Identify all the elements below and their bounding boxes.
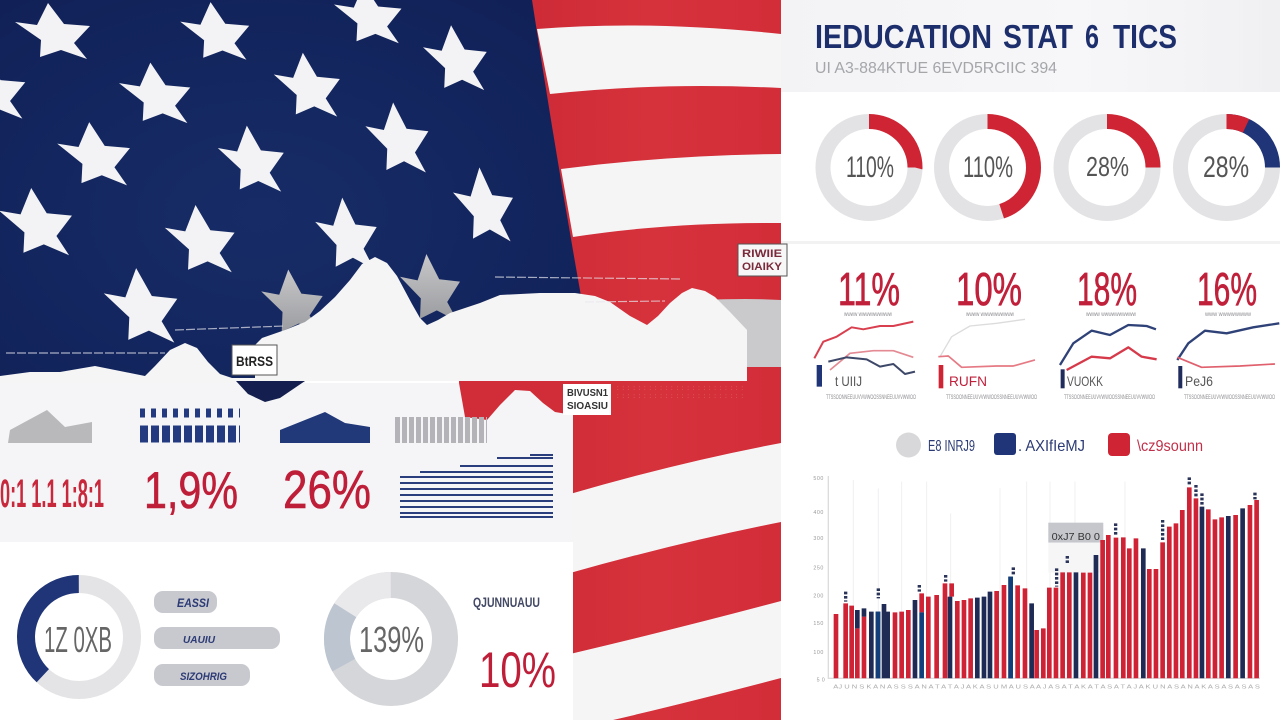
panel: left statistics: 0:1 1.1 1:8:1 bbox=[0, 472, 104, 516]
x axis labels: AJ U N S K A N A S S S A N A T A T A J A K A S U M A U S A A J A S A T A K A T A S A T A J A K U N A S A N A K A S A S A S A S bbox=[833, 684, 1260, 690]
tiny chart notes bbox=[826, 312, 1275, 401]
tiny chart notes: TTSSOONNEEUUVVWWOOSSNNEEUUVVWWOO bbox=[826, 395, 916, 401]
donut: 1 bbox=[823, 122, 915, 214]
y axis labels: 300 bbox=[813, 536, 823, 542]
subtitle: UI A3-884KTUE 6EVD5RCIIC 394 bbox=[815, 60, 1057, 77]
chart captions: VUOKK bbox=[1067, 373, 1103, 389]
y axis labels: 250 bbox=[813, 565, 823, 571]
y axis labels: 500 bbox=[813, 476, 823, 482]
title: TICS bbox=[1113, 18, 1177, 55]
stat: 10%: 10% bbox=[956, 263, 1022, 315]
y axis labels: 150 bbox=[813, 621, 823, 627]
blue bars bbox=[878, 577, 1011, 678]
donut: 3 bbox=[1061, 122, 1153, 214]
tiny chart notes: TTSSOONNEEUUVVWWOOSSNNEEUUVVWWOO bbox=[1064, 395, 1155, 401]
donut: 4: 28% bbox=[1203, 151, 1249, 184]
shaded stars bbox=[261, 254, 460, 334]
y axis labels: 400 bbox=[813, 510, 823, 516]
bar top markers bbox=[846, 477, 1255, 602]
statistic: 26%: 26% bbox=[283, 460, 371, 520]
donut: navy bbox=[26, 584, 132, 690]
legend: . AXIfIeMJ bbox=[1018, 438, 1085, 455]
callout: left bbox=[232, 345, 277, 375]
legend: \cz9sounn bbox=[1137, 438, 1203, 455]
callout: upper right: RIWIIE bbox=[742, 248, 782, 260]
donut: 2 bbox=[942, 122, 1034, 214]
title bbox=[815, 18, 1177, 55]
band divider bbox=[781, 241, 1280, 244]
donut: 4 bbox=[1180, 122, 1272, 214]
tiny chart notes: wwww wwwwwwwwww bbox=[843, 312, 893, 318]
canton bbox=[0, 0, 581, 392]
donut: grey bbox=[337, 585, 445, 693]
y axis labels: 100 bbox=[813, 650, 823, 656]
panel: right column bbox=[781, 0, 1280, 720]
title: 6 bbox=[1085, 18, 1099, 55]
icon: navy area chart bbox=[280, 412, 370, 443]
shaded stripe bbox=[700, 299, 781, 367]
pill labels bbox=[154, 591, 280, 686]
stat: 18%: 18% bbox=[1077, 263, 1137, 315]
callout: middle bbox=[563, 384, 611, 415]
icon: grey area chart bbox=[8, 410, 92, 443]
flag background bbox=[0, 0, 782, 720]
axis bbox=[828, 476, 1260, 678]
stat: 11%: 11% bbox=[838, 263, 900, 315]
legend bbox=[896, 432, 1203, 458]
chart captions: PeJ6 bbox=[1185, 373, 1213, 389]
dotted red band text: : : : : : : : : : : : : : : : : : : : : : : : : bbox=[617, 386, 743, 392]
donut: 3: 28% bbox=[1086, 151, 1129, 182]
dotted red band text bbox=[617, 386, 743, 400]
donut: navy: 1Z 0XB bbox=[44, 619, 112, 660]
y axis labels bbox=[813, 476, 825, 684]
tiny chart notes: wwww wwwwwwwwww bbox=[965, 312, 1015, 318]
panel: left statistics bbox=[0, 381, 573, 543]
chart captions: RUFN bbox=[949, 373, 987, 389]
callout: left: BtRSS bbox=[236, 353, 273, 369]
pill labels: UAUIU bbox=[183, 635, 216, 646]
small label: QJUNNUAUU bbox=[473, 594, 540, 610]
statistic: 10%: 10% bbox=[479, 642, 556, 698]
red wedge bbox=[459, 381, 579, 423]
line charts bbox=[814, 319, 1279, 388]
callout: upper right: OIAIKY bbox=[742, 261, 783, 273]
bar chart bbox=[813, 476, 1260, 690]
y axis labels: 200 bbox=[813, 593, 823, 599]
callout: middle: BIVUSN1 bbox=[567, 388, 608, 399]
chart leader lines bbox=[6, 277, 680, 353]
header band bbox=[781, 0, 1280, 92]
chart captions bbox=[835, 373, 1213, 389]
torn white area chart bbox=[0, 257, 747, 385]
tiny chart notes: wwww wwwwwwwwww bbox=[1085, 312, 1137, 318]
icon: navy pattern chart bbox=[140, 413, 240, 434]
chart captions: t UIIJ bbox=[835, 373, 862, 389]
legend: E8 INRJ9 bbox=[928, 438, 975, 455]
callout text: 0xJ7 B0 0 bbox=[1052, 532, 1100, 543]
dotted red band text: : : : : : : : : : : : : : : : : : : : : : : : : bbox=[617, 394, 743, 400]
statistic: 1,9%: 1,9% bbox=[144, 462, 238, 520]
statistics row with line charts bbox=[814, 263, 1279, 401]
donut: 1: 110% bbox=[846, 151, 894, 184]
stars bbox=[0, 0, 513, 343]
title: STAT bbox=[1003, 18, 1073, 55]
icon: grey pattern chart bbox=[395, 417, 487, 443]
tiny chart notes: TTSSOONNEEUUVVWWOOSSNNEEUUVVWWOO bbox=[946, 395, 1037, 401]
stepped line chart bbox=[400, 455, 553, 517]
donut: 2: 110% bbox=[963, 151, 1013, 184]
callout: upper right bbox=[738, 244, 787, 276]
navy valley under callout bbox=[236, 381, 305, 402]
callout: middle: SIOASIU bbox=[567, 401, 608, 412]
pill labels: SIZOHRIG bbox=[180, 671, 227, 683]
donut: grey: 139% bbox=[359, 619, 424, 660]
panel: lower left bbox=[0, 542, 573, 720]
flag stripes bbox=[537, 25, 781, 720]
gridlines bbox=[853, 480, 1125, 677]
title: IEDUCATION bbox=[815, 18, 992, 55]
tiny chart notes: www wwwwwwww bbox=[1204, 312, 1252, 318]
red bars bbox=[836, 487, 1257, 678]
navy bars bbox=[857, 507, 1243, 678]
callout background bbox=[1048, 523, 1103, 543]
pill labels: EASSI bbox=[177, 596, 210, 610]
y axis labels: 50 bbox=[817, 678, 825, 684]
